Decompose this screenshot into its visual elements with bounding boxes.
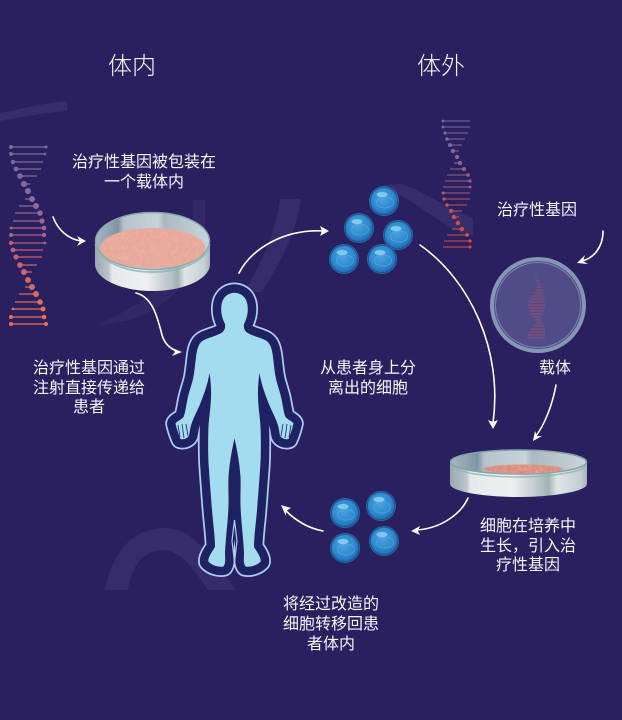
text: direct delivery	[33, 359, 145, 416]
text: transfer back: 将经过改造的	[283, 595, 379, 613]
arrow: dish to modified cells	[411, 498, 468, 535]
arrow: gene to vector	[577, 231, 603, 264]
text: direct delivery: 注射直接传递给	[33, 379, 145, 397]
vector: circle containing DNA	[490, 257, 586, 353]
petri dish: culture	[450, 450, 587, 497]
text: culture step: 生长，引入治	[480, 537, 576, 555]
arrow: DNA to dish	[53, 217, 86, 246]
cells: isolated from patient	[329, 186, 413, 274]
petri dish: in vivo	[95, 212, 210, 291]
text: isolated cells	[320, 359, 416, 397]
arrow: cells to culture dish	[420, 245, 498, 429]
text: therapeutic gene: 治疗性基因	[497, 201, 577, 219]
text: direct delivery: 治疗性基因通过	[33, 359, 145, 377]
text: transfer back: 者体内	[307, 635, 355, 653]
text: vector: 载体	[539, 359, 571, 377]
text: culture step: 疗性基因	[496, 556, 560, 574]
text: packaged gene: 治疗性基因被包装在	[72, 153, 216, 171]
title: in vivo: 体内	[108, 53, 156, 80]
icon: left DNA helix	[9, 145, 48, 326]
arrow: dish to patient	[136, 293, 182, 356]
icon: right DNA helix	[442, 120, 472, 248]
text: packaged gene	[72, 153, 216, 191]
faint background arcs	[0, 101, 473, 590]
text: direct delivery: 患者	[73, 398, 105, 416]
text: culture step	[480, 517, 576, 574]
text: isolated cells: 离出的细胞	[328, 379, 408, 397]
text: isolated cells: 从患者身上分	[320, 359, 416, 377]
title: ex vivo: 体外	[417, 53, 465, 80]
text: packaged gene: 一个载体内	[104, 173, 184, 191]
arrow: patient to cells	[239, 226, 329, 273]
text: transfer back	[283, 595, 379, 653]
text: culture step: 细胞在培养中	[480, 517, 576, 535]
figure: human body	[176, 293, 294, 567]
arrow: vector to culture dish	[533, 385, 556, 441]
arrow: modified cells to patient	[281, 505, 323, 531]
text: transfer back: 细胞转移回患	[283, 615, 379, 633]
cells: modified	[330, 491, 399, 563]
